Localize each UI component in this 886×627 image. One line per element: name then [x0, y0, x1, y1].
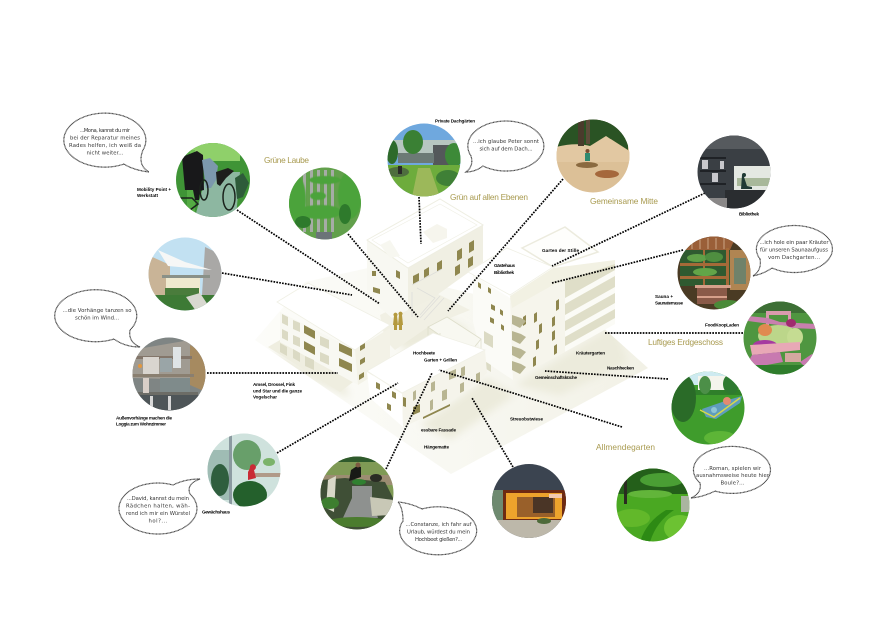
small labels: Bibliothek [739, 212, 759, 216]
small labels: Naschhecken [607, 366, 634, 370]
small labels: und Star und die ganze [253, 388, 302, 394]
heading: Grüne Laube: Grüne Laube [264, 155, 309, 165]
speech bubble: Kräuter: ...ich hole ein paar Kräuter [760, 240, 829, 246]
speech bubble: Constanze: ...Constanze, ich fahr auf [406, 522, 472, 528]
heading: Luftiges Erdgeschoss: Luftiges Erdgeschoss [648, 337, 723, 347]
ground plane [255, 268, 648, 474]
photo: sand hill playground [556, 119, 630, 193]
small labels: Loggia zum Wohnzimmer [116, 422, 166, 426]
speech bubble: Peter: ...ich glaube Peter sonnt [473, 139, 539, 145]
small labels: Garten + Grillen [424, 358, 457, 362]
dotted leader lines [207, 179, 745, 469]
speech bubble: Kräuter [753, 226, 832, 276]
speech bubble: Vorhänge [55, 290, 140, 347]
building: west block [268, 283, 390, 392]
heading: Allmendegarten: Allmendegarten [596, 442, 655, 452]
speech bubble: Constanze [398, 502, 477, 555]
speech bubble: Mona: nicht weiter... [86, 150, 124, 156]
small labels: Hängematte [424, 444, 449, 450]
small labels: Bibliothek [494, 270, 514, 275]
photo: loggia with curtains [132, 337, 206, 411]
building: south block [367, 317, 487, 427]
speech bubble: Mona: bei der Reparatur meines [70, 136, 140, 142]
photo: green wall [288, 167, 362, 241]
speech bubble: David: Rädchen halten, wäh- [126, 504, 190, 510]
speech bubble: Kräuter: vom Dachgarten... [768, 255, 820, 261]
photo: private roof garden [386, 123, 463, 197]
speech bubble: Constanze: Hochbeet gießen?... [415, 537, 462, 543]
infographic canvas [54, 112, 833, 556]
speech bubble: David: rend ich mir ein Würstel [126, 511, 190, 517]
speech bubble: Mona [64, 113, 149, 172]
photo: greenhouse [207, 433, 281, 509]
photo: orange lit pavilion [492, 464, 566, 538]
small labels: Gästehaus [494, 263, 515, 268]
small labels: Hochbeete [413, 350, 435, 356]
small labels [116, 118, 759, 514]
speech bubble: Roman: ausnahmsweise heute hier [696, 473, 770, 479]
speech bubble: David: ...David, kannst du mein [127, 496, 189, 502]
small labels: Saunaterrasse [655, 300, 683, 306]
speech bubble: Roman [691, 446, 770, 498]
speech bubble: Vorhänge: schön im Wind... [75, 316, 119, 322]
speech bubble: Roman: Boule?... [720, 480, 745, 486]
external stair [412, 269, 444, 320]
small labels: Mobility Point + [137, 187, 171, 192]
speech bubble: Vorhänge: ...die Vorhänge tanzen so [62, 308, 132, 314]
small labels: Streuobstwiese [510, 416, 543, 422]
small labels: Kräutergarten [576, 350, 605, 356]
photo: hammock in orchard [670, 371, 745, 445]
heading: Grün auf allen Ebenen: Grün auf allen Ebenen [450, 192, 528, 202]
photo: library window seat [697, 135, 771, 210]
small labels: Sauna + [655, 294, 673, 299]
photo: sauna terrace [677, 236, 751, 310]
building: north block [367, 199, 483, 320]
speech bubble: Kräuter: für unseren Saunaaufguss [760, 248, 828, 254]
photo: raised beds [320, 456, 394, 530]
small labels: Außenvorhänge machen die [116, 416, 172, 420]
small labels: FoodKoopLaden [705, 322, 739, 328]
photo: bicycle repair [175, 143, 251, 222]
speech bubble: David [119, 479, 200, 534]
photo: food crate and hands [743, 301, 817, 375]
building: east block [468, 227, 615, 380]
heading: Gemeinsame Mitte: Gemeinsame Mitte [590, 196, 658, 206]
small labels: Vogelschar [253, 394, 277, 400]
speech bubble: Constanze: Urlaub, würdest du mein [407, 530, 470, 536]
small labels: Private Dachgärten [435, 118, 475, 124]
isometric building model [255, 199, 648, 474]
ground shading [268, 310, 628, 440]
speech bubble: Roman: ...Roman, spielen wir [704, 466, 762, 472]
small labels: essbare Fassade [421, 428, 456, 432]
central plaza [380, 290, 470, 350]
photo: courtyard with sail [148, 237, 222, 313]
speech bubble: Mona: ...Mona, kannst du mir [80, 128, 131, 134]
photo: meadow path [616, 468, 690, 542]
small labels: Gemeinschaftsküche [535, 375, 577, 380]
small labels: Garten der Stille [542, 248, 579, 253]
small labels: Werkstatt [137, 193, 158, 198]
speech bubble: Peter: sich auf dem Dach... [480, 146, 533, 152]
speech bubble: Peter [466, 121, 544, 172]
small labels: Amsel, Drossel, Fink [253, 382, 295, 387]
icon: two people figures [393, 312, 403, 330]
speech bubble: David: hol?... [148, 518, 168, 524]
small labels: Gewächshaus [202, 510, 230, 514]
speech bubble: Mona: Rades helfen, ich weiß da [69, 143, 141, 149]
